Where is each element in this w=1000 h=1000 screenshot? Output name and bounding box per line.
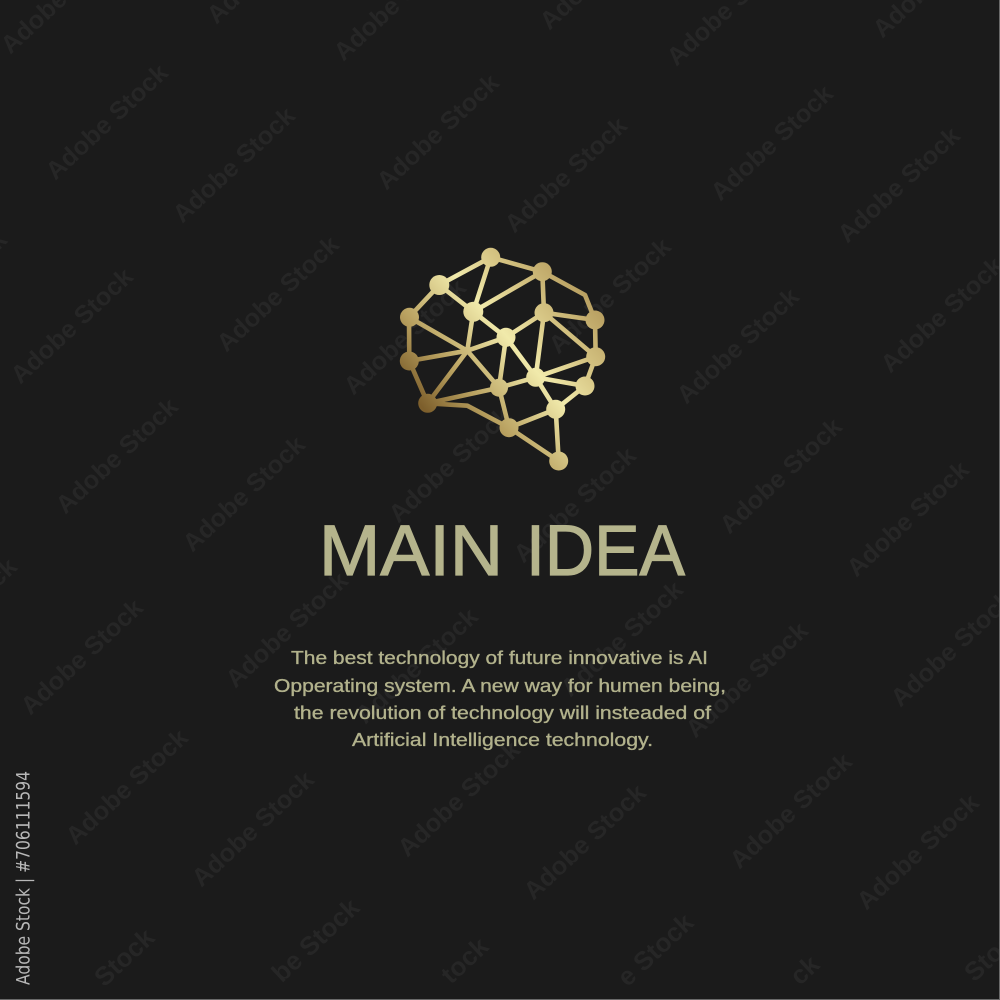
description text block: [274, 647, 726, 750]
watermark pattern: ck: [784, 949, 826, 991]
watermark pattern: Adobe Stock: [518, 778, 652, 905]
watermark pattern: Adobe Stock: [851, 788, 985, 915]
brain network nodes: [400, 248, 605, 470]
watermark pattern: Adobe Stock: [15, 593, 149, 720]
watermark pattern: Adobe Stock: [543, 232, 677, 359]
title: MAIN: [319, 512, 503, 591]
title: IDEA: [526, 512, 686, 591]
watermark pattern: Adobe Stock: [338, 273, 472, 400]
description text block: Opperating system. A new way for humen being,: [274, 675, 726, 696]
watermark pattern: Adobe Stock: [508, 441, 642, 568]
title: [319, 512, 686, 591]
watermark pattern: Adobe Stock: [167, 101, 301, 228]
description text block: the revolution of technology will insteaded of: [294, 702, 712, 723]
watermark pattern: Adobe Stock: [383, 401, 517, 528]
watermark pattern: Adobe Stock: [392, 735, 526, 862]
watermark pattern: be Stock: [266, 892, 366, 988]
watermark pattern: Adobe Stock: [50, 392, 184, 519]
description text block: Artificial Intelligence technology.: [352, 729, 653, 750]
description text block: The best technology of future innovative is AI: [291, 647, 708, 668]
watermark pattern: Adobe Stock: [671, 282, 805, 409]
watermark pattern: tock: [435, 931, 495, 989]
watermark pattern: Adobe Stock: [714, 412, 848, 539]
brain network lines: [409, 257, 596, 461]
watermark pattern: Adobe Stock: [499, 111, 633, 238]
watermark pattern: Adobe Stock: [350, 602, 484, 729]
icon: gold network brain: [400, 248, 605, 470]
watermark pattern: Adobe Stock: [841, 455, 975, 582]
watermark pattern: Adobe Stock: [186, 765, 320, 892]
watermark pattern: Adobe Stock: [220, 566, 354, 693]
watermark pattern: Adobe Stock: [724, 747, 858, 874]
watermark pattern: Stock: [88, 922, 161, 992]
watermark pattern: Adobe Stock: [211, 230, 345, 357]
watermark pattern: Adobe Stock: [680, 616, 814, 743]
watermark pattern: Adobe Stock: [40, 58, 174, 185]
watermark pattern: Adobe Stock: [705, 79, 839, 206]
watermark pattern: Adobe Stock: [832, 121, 966, 248]
watermark pattern: Adobe Stock: [555, 575, 689, 702]
watermark pattern: Adobe Stock: [371, 68, 505, 195]
watermark pattern: Adobe Stock: [5, 262, 139, 389]
stock id side label: Adobe Stock | #706111594: [12, 771, 34, 985]
watermark pattern: Adobe Stock: [60, 723, 194, 850]
watermark pattern: Adobe Stock: [177, 430, 311, 557]
watermark pattern: e Stock: [611, 907, 700, 992]
